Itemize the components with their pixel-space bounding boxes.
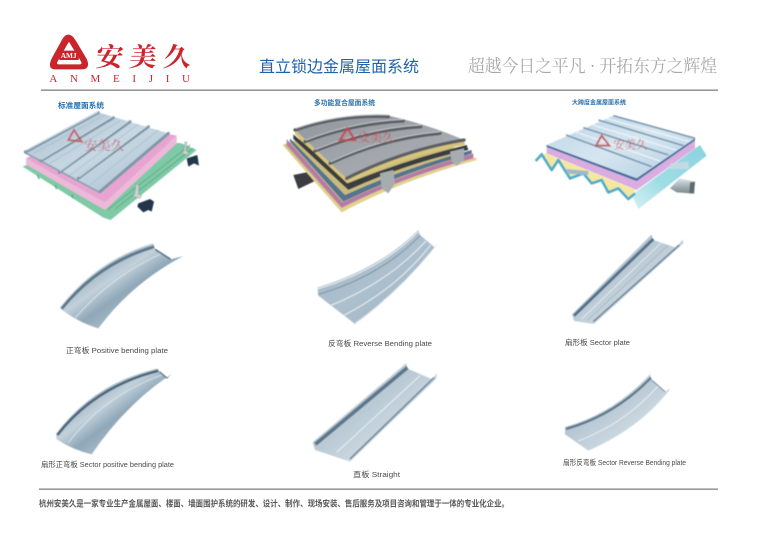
logo latin name: ANMEIJIU bbox=[49, 73, 190, 85]
watermark: 安美久 bbox=[84, 138, 125, 153]
metal sheet bbox=[25, 112, 168, 192]
roof illustration: standard system bbox=[23, 112, 199, 220]
logo bbox=[49, 35, 193, 85]
watermark bbox=[596, 136, 648, 151]
black grid bbox=[293, 134, 468, 190]
caption: straight plate: 直板 Straight bbox=[353, 469, 401, 479]
teal sheet bbox=[632, 145, 707, 209]
plate: sector reverse bending bbox=[565, 374, 671, 451]
green deck bbox=[23, 135, 197, 220]
heading: multifunction composite roof system: 多功能复合屋面系统 bbox=[314, 98, 375, 107]
pink insulation bbox=[26, 120, 177, 202]
blue layer bbox=[290, 138, 472, 202]
heading: standard roof system: 标准屋面系统 bbox=[58, 100, 104, 110]
plate: straight bbox=[313, 363, 437, 462]
watermark: 安美久 bbox=[358, 130, 394, 145]
plate: sector bbox=[572, 234, 683, 324]
logo chinese name bbox=[95, 43, 193, 72]
ribs bbox=[295, 115, 464, 178]
logo emblem: AMJ bbox=[61, 51, 77, 60]
footer rule bbox=[39, 488, 718, 490]
tube bbox=[670, 178, 695, 194]
metal sheet bbox=[547, 116, 695, 178]
plate: reverse bending bbox=[317, 230, 437, 324]
watermark bbox=[68, 130, 125, 153]
corrugated profile bbox=[536, 154, 635, 199]
yellow insulation fill bbox=[542, 153, 636, 198]
caption: reverse bending plate: 反弯板 Reverse Bending plate bbox=[328, 338, 432, 348]
roof illustration: long span system bbox=[536, 116, 707, 209]
heading: long span metal roof system: 大跨度金属屋面系统 bbox=[572, 98, 626, 106]
beams bbox=[137, 199, 154, 212]
pink insulation bbox=[547, 138, 695, 190]
caption: sector plate: 扇形板 Sector plate bbox=[565, 337, 630, 347]
main title: 直立锁边金属屋面系统 bbox=[259, 58, 419, 76]
yellow under metal bbox=[295, 130, 465, 183]
logo chinese name: 久 bbox=[162, 43, 193, 72]
bars bbox=[567, 169, 588, 175]
caption: positive bending plate: 正弯板 Positive bending plate bbox=[66, 345, 168, 355]
seams bbox=[25, 112, 168, 192]
logo emblem bbox=[50, 35, 88, 69]
pink layer bbox=[287, 139, 473, 208]
curved metal bbox=[295, 115, 464, 178]
watermark bbox=[340, 128, 394, 145]
tube bbox=[293, 172, 315, 189]
caption: sector positive bending plate: 扇形正弯板 Sector positive bending plate bbox=[41, 459, 174, 469]
logo chinese name: 美 bbox=[128, 43, 158, 72]
slogan: 超越今日之平凡 · 开拓东方之辉煌 bbox=[468, 56, 717, 76]
watermark: 安美久 bbox=[613, 137, 648, 151]
footer company description: 杭州安美久是一家专业生产金属屋面、楼面、墙面围护系统的研发、设计、制作、现场安装、售后服务及项目咨询和管理于一体的专业化企业。 bbox=[39, 498, 509, 508]
seams bbox=[566, 116, 695, 167]
logo chinese name: 安 bbox=[95, 43, 127, 72]
header rule bbox=[41, 90, 718, 91]
plate: positive bending bbox=[60, 243, 183, 328]
roof illustration: composite system bbox=[283, 115, 477, 212]
plate: sector positive bending bbox=[56, 368, 172, 454]
clips bbox=[133, 184, 142, 198]
caption: sector reverse bending plate: 扇形反弯板 Sector Reverse Bending plate bbox=[563, 457, 686, 467]
yellow base bbox=[283, 128, 477, 212]
brackets bbox=[380, 170, 395, 193]
